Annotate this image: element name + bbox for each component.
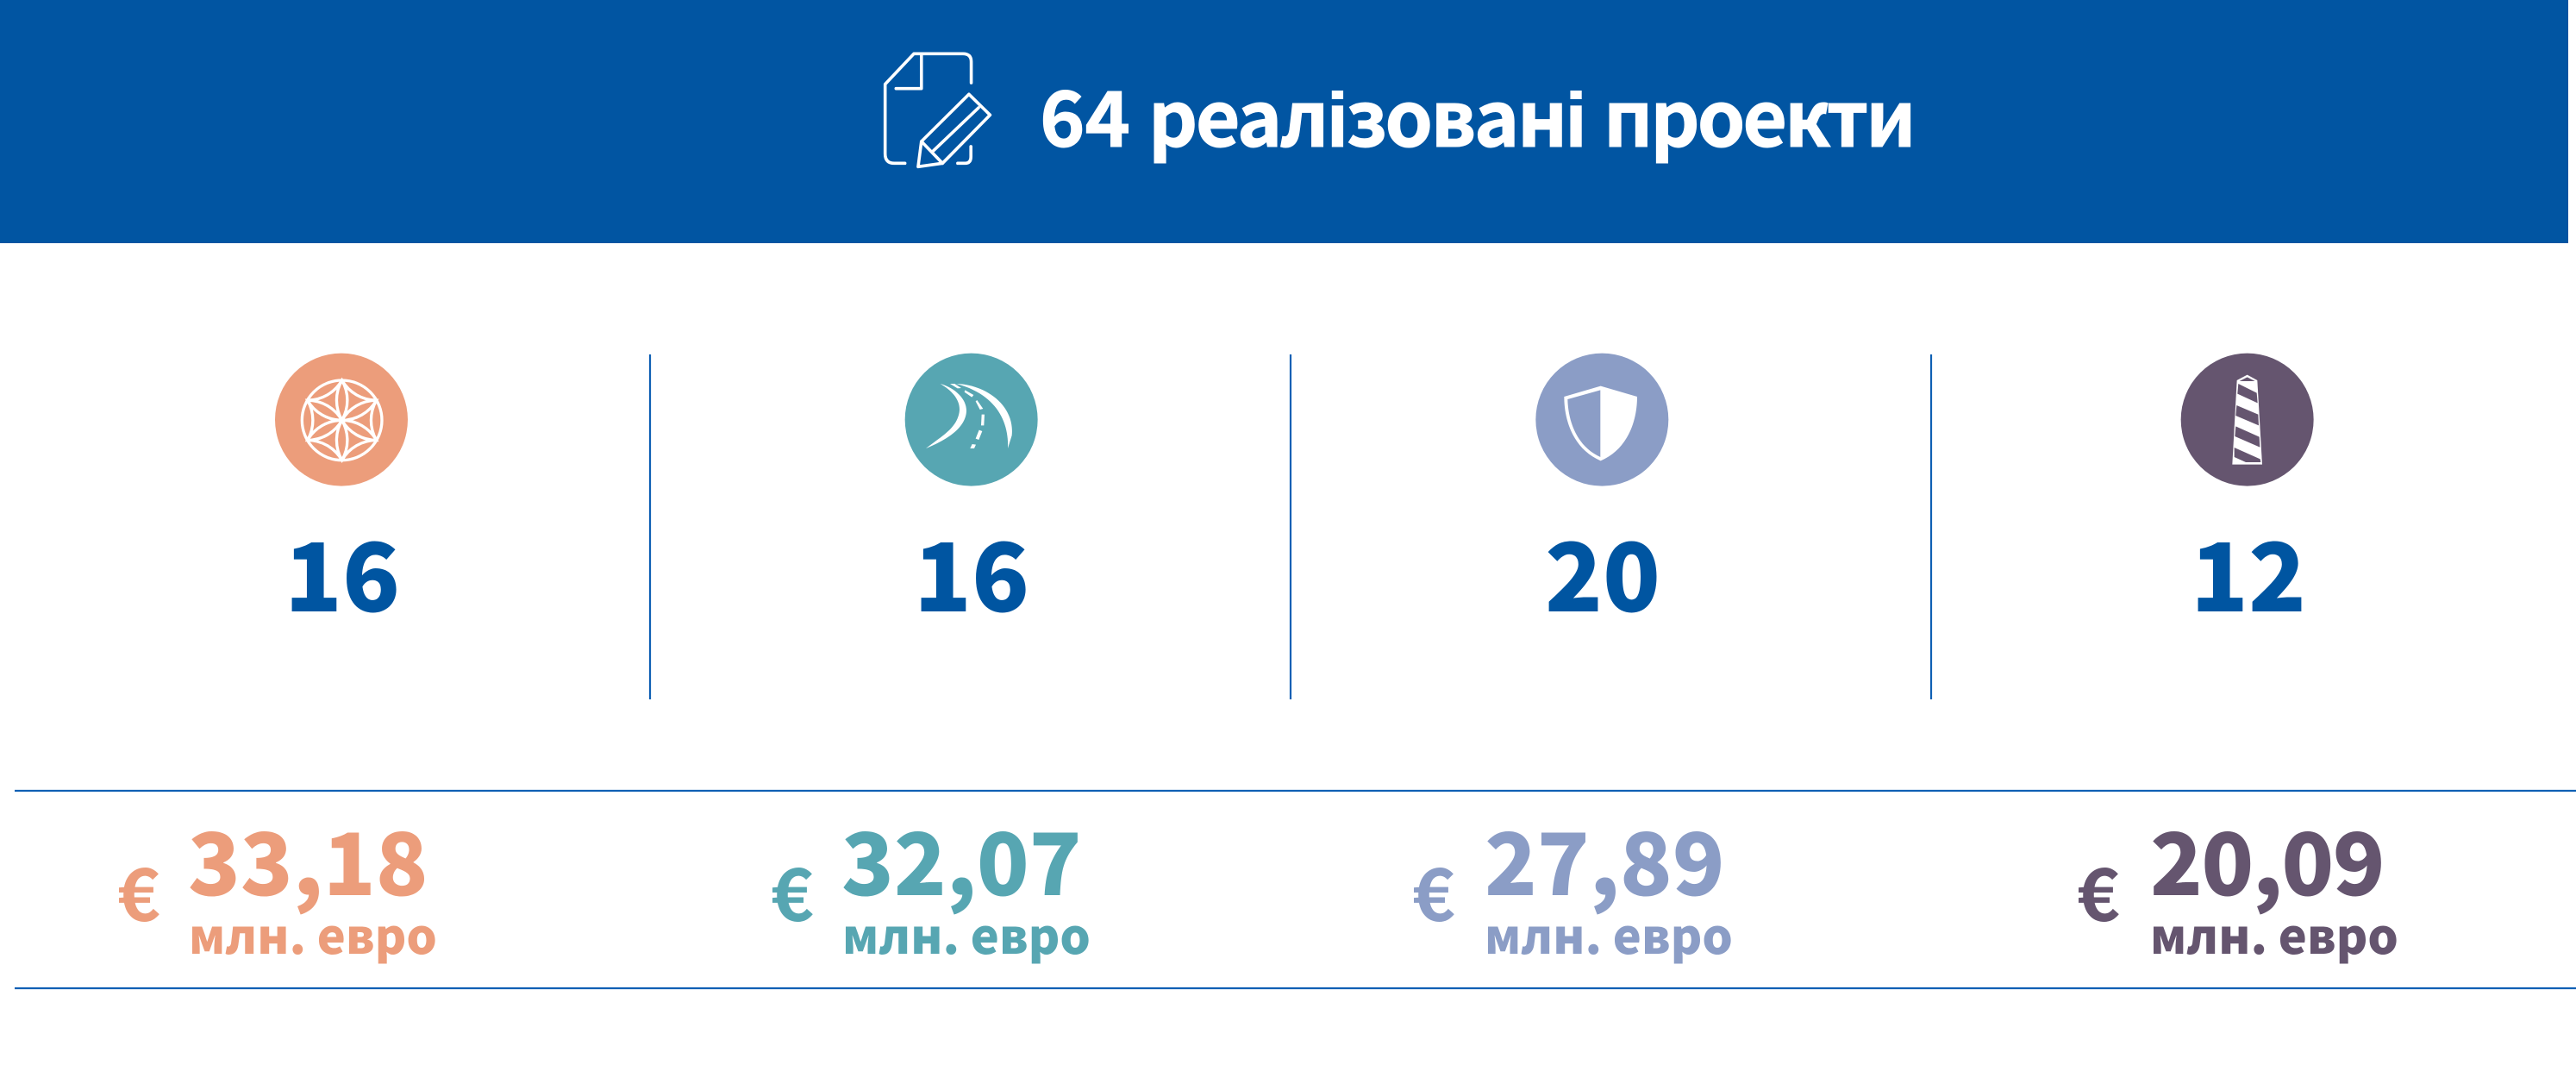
- count: 12: [2191, 501, 2306, 639]
- amount: 27,89: 27,89: [1485, 795, 1725, 920]
- icon: road: [905, 354, 1038, 486]
- amount: 33,18: 33,18: [188, 795, 428, 920]
- count: 20: [1545, 501, 1660, 639]
- amount: 33,18: [117, 795, 437, 968]
- header banner: [0, 0, 2568, 243]
- icon: document with pencil: [885, 53, 990, 166]
- amount: 20,09: [2077, 795, 2398, 968]
- column: cultural heritage: [275, 354, 408, 639]
- amount: 32,07: 32,07: [841, 795, 1082, 920]
- icon: striped border post: [2181, 354, 2314, 486]
- count: 16: [284, 501, 400, 639]
- icon: shield: [1535, 354, 1668, 486]
- title: 64: [1040, 58, 1130, 169]
- amount: 32,07: [771, 795, 1091, 968]
- column dividers: [650, 354, 1931, 699]
- amount: 32,07: €: [771, 838, 814, 943]
- amount: 33,18: €: [117, 838, 160, 943]
- funding rows rules: [15, 791, 2576, 988]
- amount: 33,18: млн. евро: [189, 899, 437, 968]
- amount: 27,89: €: [1412, 838, 1455, 943]
- amount: 20,09: 20,09: [2150, 795, 2384, 920]
- amount: 32,07: млн. евро: [842, 899, 1091, 968]
- amount: 20,09: €: [2077, 838, 2120, 943]
- amount: 27,89: млн. евро: [1485, 899, 1733, 968]
- title: проекти: [1604, 58, 1914, 169]
- title: реалізовані: [1148, 58, 1585, 169]
- column: security: [1535, 354, 1668, 639]
- amount: 20,09: млн. евро: [2150, 899, 2398, 968]
- column: roads: [905, 354, 1038, 639]
- icon: rosette: [275, 354, 408, 486]
- count: 16: [914, 501, 1029, 639]
- column: border crossing: [2181, 354, 2314, 639]
- amount: 27,89: [1412, 795, 1733, 968]
